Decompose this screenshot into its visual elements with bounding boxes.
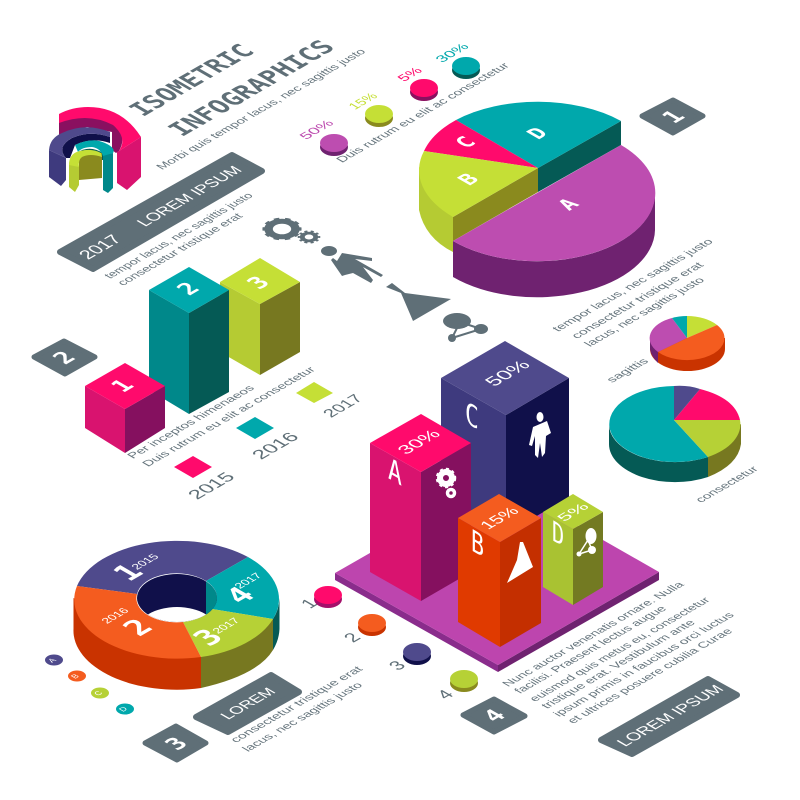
badge: 3: 3 — [160, 734, 194, 754]
icon: person — [321, 246, 383, 283]
text: lorem description: lacus, nec sagittis justo — [240, 681, 366, 754]
chart: donut — [73, 541, 279, 690]
legend: A B C D: C — [92, 689, 105, 697]
bar 2: 2 — [172, 279, 206, 299]
list: numbered dots: 3 — [384, 658, 410, 673]
text: title subtitle: Morbi quis tempor lacus, nec sagittis justo — [154, 47, 369, 172]
badge: 1 — [642, 100, 703, 133]
badge: 2017 lorem ipsum — [60, 155, 262, 269]
platform — [335, 480, 659, 672]
text: legend caption: Duis rutrum eu elit ac consectetur — [334, 61, 513, 165]
chart: small pie sagittis — [650, 316, 725, 371]
chart: donut: 2017 — [232, 571, 265, 591]
chart: donut: 2 — [116, 614, 162, 641]
text: bars caption: Per inceptos himenaeos — [125, 384, 258, 461]
text: main paragraph: facilisi. Praesent lectus augue — [512, 604, 670, 696]
bar A 30% — [370, 414, 471, 601]
legend: A B C D: A — [46, 656, 59, 664]
bar C 50%: C — [465, 395, 479, 438]
badge: 4 — [463, 699, 525, 732]
text: main paragraph: Nunc auctor venenatis ornare. Nulla — [500, 580, 688, 689]
title: isometric infographics: ISOMETRIC — [123, 40, 262, 121]
badge: 1: 1 — [657, 107, 691, 127]
text: badge description: consectetur tristique erat — [115, 212, 247, 288]
text: consectetur: consectetur — [693, 465, 762, 505]
bar D 5%: D — [552, 514, 564, 554]
text: main paragraph: euismod quis metus eu, consectetur — [527, 596, 714, 704]
text: main paragraph — [500, 580, 738, 726]
bar B 15% — [458, 494, 541, 647]
legend: years: 2016 — [247, 429, 303, 462]
title: isometric infographics: INFOGRAPHICS — [162, 36, 342, 141]
legend: A B C D — [45, 654, 134, 714]
legend: A B C D: D — [117, 705, 130, 713]
badge: 4: 4 — [478, 706, 512, 726]
list: numbered dots: 4 — [432, 687, 458, 702]
bar C 50%: 50% — [480, 357, 535, 389]
bar B 15%: 15% — [477, 505, 524, 532]
text: lorem description: consectetur tristique erat — [228, 665, 367, 745]
text: main paragraph: et ultrices posuere cubilia Curae — [565, 627, 736, 726]
bar D 5%: 5% — [553, 500, 593, 524]
bar C 50% — [441, 341, 569, 534]
icon: network — [443, 313, 488, 342]
chart: donut: 3 — [186, 624, 232, 651]
chart: large exploded pie: D — [522, 124, 553, 143]
text: badge description: tempor lacus, nec sagittis justo — [102, 191, 256, 281]
badge: lorem — [196, 675, 299, 732]
legend: percent dots — [296, 41, 480, 156]
bar D 5% — [543, 494, 603, 605]
chart: large exploded pie: A — [553, 195, 585, 214]
legend: years: 2015 — [183, 469, 239, 502]
text: bars caption: Duis rutrum eu elit ac consectetur — [140, 365, 319, 469]
chart: large exploded pie: C — [450, 133, 481, 152]
bar 3: 3 — [242, 273, 276, 293]
legend: years: 2017 — [320, 392, 367, 420]
chart: donut: 2017 — [210, 616, 243, 636]
badge: 2017 lorem ipsum: LOREM IPSUM — [134, 164, 246, 229]
text: pie description — [550, 237, 716, 349]
badge: lorem: LOREM — [217, 685, 280, 722]
list: numbered dots — [296, 586, 478, 702]
chart: main isometric bars on platform — [335, 341, 659, 672]
legend: percent dots: 50% — [296, 117, 338, 142]
chart: large exploded pie: B — [453, 170, 484, 189]
chart: yearly bars — [85, 258, 300, 453]
list: numbered dots: 1 — [296, 596, 322, 611]
bar 1 — [85, 363, 165, 453]
text: pie description: lacus, nec sagittis justo — [582, 276, 708, 349]
chart: donut: 2015 — [129, 552, 162, 572]
bar 1: 1 — [106, 376, 140, 396]
bar A 30%: 30% — [393, 427, 445, 457]
bar A 30%: A — [388, 451, 402, 494]
badge: 2: 2 — [48, 348, 82, 368]
chart: donut: 4 — [218, 582, 264, 609]
legend: years — [174, 382, 367, 502]
badge: 3 — [145, 726, 206, 760]
icon: gears — [258, 215, 323, 245]
chart: donut: 2016 — [99, 606, 132, 626]
bar 3 — [220, 258, 300, 375]
legend: percent dots: 15% — [345, 90, 381, 112]
text: lorem description — [228, 665, 367, 754]
icon: flask — [386, 283, 451, 321]
list: numbered dots: 2 — [339, 630, 365, 645]
bar 2 — [149, 267, 229, 414]
chart: donut: 1 — [106, 559, 152, 586]
text: pie description: consectetur tristique erat — [569, 261, 708, 341]
chart: medium pie consectetur — [609, 386, 741, 482]
text: sagittis: sagittis — [604, 357, 652, 385]
text: main paragraph: ipsum primis in faucibus orci luctus — [551, 611, 738, 719]
text: main paragraph: tristique erat. Vestibulum ante — [539, 618, 699, 711]
badge: 2 — [34, 341, 95, 374]
legend: percent dots: 5% — [394, 65, 426, 84]
chart: large exploded pie — [419, 102, 655, 297]
icon: concentric rings — [49, 107, 141, 193]
badge: lorem ipsum bottom: LOREM IPSUM — [614, 683, 728, 749]
badge: 2017 lorem ipsum: 2017 — [74, 232, 126, 262]
legend: A B C D: B — [69, 673, 81, 680]
bar B 15%: B — [471, 523, 484, 566]
text: pie description: tempor lacus, nec sagittis justo — [550, 237, 716, 334]
legend: percent dots: 30% — [432, 41, 473, 65]
